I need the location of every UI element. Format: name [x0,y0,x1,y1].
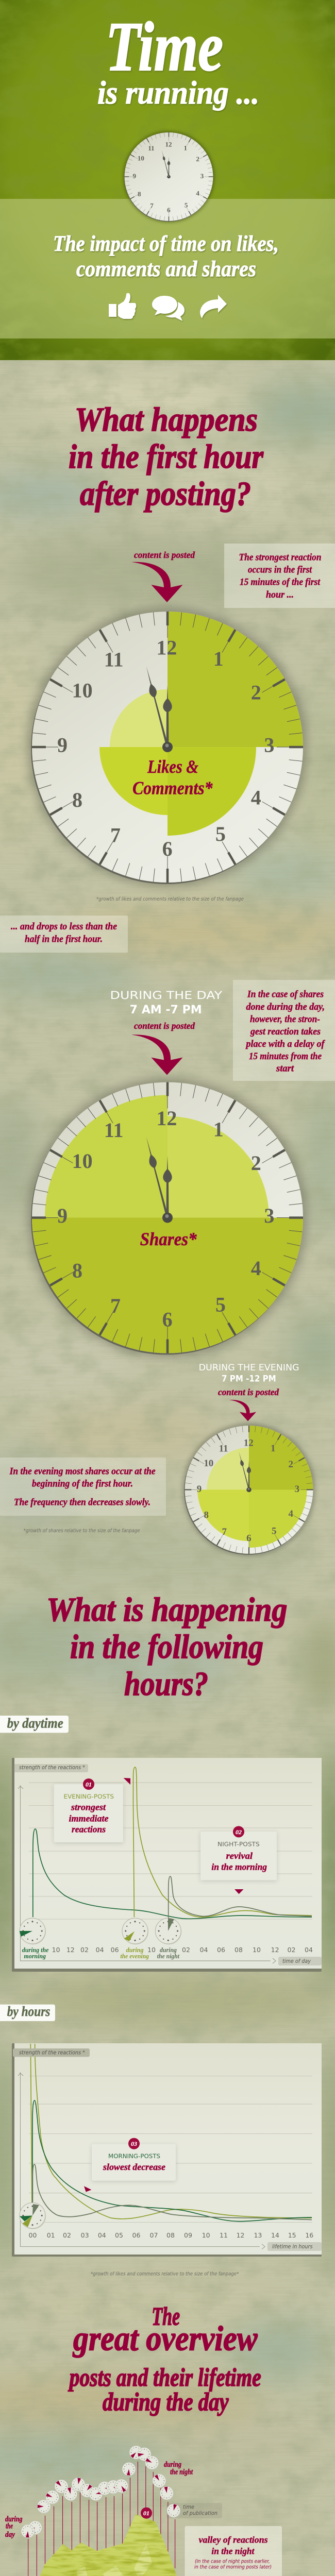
clock label: likes and comments: Comments* [132,778,213,799]
heading: the great overview: during the day [103,2387,229,2416]
callout: valley of reactions in the night [185,2526,282,2576]
x axis lifetime hours: 11 [220,2231,228,2239]
header clock: 7 [150,201,154,209]
x axis labels: publication times: the night [157,1952,179,1960]
clock chart: shares during the day: 1 [213,1118,224,1141]
line chart: reactions by hours [12,2043,322,2257]
y axis label: strength of the reactions * [19,2049,85,2056]
x axis label: lifetime in hours [272,2243,313,2250]
quadrant: 12 to 3 [249,1426,313,1490]
chart panel [12,2043,322,2257]
callout: shares during the day: gest reaction takes [250,1027,321,1037]
clock chart: likes and comments: 10 [72,679,93,702]
quadrant: 6 to 9 [197,1490,249,1541]
quadrant: 12 to 3 [167,612,303,747]
curve: morning posts [33,1829,312,1919]
callout: valley of reactions in the night: (In the case of night posts earlier, [195,2558,270,2564]
callout 01: evening posts: immediate [69,1814,109,1824]
header clock: 11 [148,144,155,152]
callout: evening shares: beginning of the first hour. [32,1479,133,1489]
arrow: to twelve o'clock [229,1400,256,1421]
subtitle: The impact of time on likes, [53,232,279,256]
clock chart: shares during the day: 8 [72,1259,82,1282]
clock chart: shares during the day: 4 [251,1257,261,1280]
x axis lifetime hours: 09 [184,2231,192,2239]
clock chart: shares during the evening: 5 [272,1526,276,1537]
clock chart: shares during the day: 10 [72,1149,93,1173]
marker: slow decrease [84,2186,91,2192]
quadrant: 6 to 9 [99,747,167,815]
callout 02: night posts: in the morning [211,1862,267,1872]
clock label: likes and comments [132,756,213,799]
x axis label [278,1957,322,1965]
x axis hours: 02 [80,1946,89,1954]
clock chart: shares during the evening [182,1423,315,1556]
clock chart: likes and comments: 8 [72,788,82,811]
header clock: 2 [196,155,199,163]
clock hands [237,1451,252,1492]
callout 01: evening posts: 01 [86,1781,92,1788]
clock icon: morning [20,1918,46,1944]
heading: what is happening in the following hours: hours? [124,1665,208,1703]
marker: morning revival [234,1889,244,1894]
x axis hours: 12 [66,1946,75,1954]
x axis lifetime hours: 01 [47,2231,55,2239]
callout 03: morning posts: MORNING-POSTS [108,2153,160,2160]
axes [18,2072,265,2249]
x axis hours: 10 [253,1946,261,1954]
clock icon: all publication times [20,2202,46,2229]
x axis lifetime hours: 16 [305,2231,313,2239]
badge 01 [141,2507,152,2519]
line chart: reactions by daytime [12,1758,322,1972]
callout: strongest reaction: The strongest reaction [239,552,322,563]
x axis hours: 12 [271,1946,279,1954]
callout 02: night posts: NIGHT-POSTS [217,1840,260,1848]
x axis hours: 10 [147,1946,156,1954]
footnote: growth of likes: *growth of likes and comments relative to the size of the fanpage* [91,2271,239,2277]
clock chart: likes and comments: 1 [213,647,224,670]
x axis lifetime hours: 12 [236,2231,244,2239]
header clock: 10 [138,154,144,162]
quadrant: 3 to 6 [167,1218,303,1353]
label: during the day: 7 AM -7 PM [130,1004,202,1016]
header clock: 4 [196,189,199,197]
x axis hours: 04 [200,1946,208,1954]
x axis lifetime hours: 15 [288,2231,296,2239]
clock chart: shares during the day: 12 [156,1107,177,1130]
legend: time of publication: time [183,2504,194,2511]
title [97,8,259,111]
footnote: growth of likes: *growth of likes and comments relative to the size of the fanpage [96,896,244,902]
clock chart: shares during the day: 6 [162,1308,173,1331]
callout: strongest reaction [224,544,335,608]
clock chart: likes and comments: 5 [215,822,226,845]
quadrant: 9 to 12 [45,1095,167,1218]
callout: strongest reaction: 15 minutes of the first [240,578,321,588]
callout: evening shares [0,1458,166,1516]
callout 01: evening posts: reactions [72,1824,106,1835]
chart panel [12,1758,322,1972]
callout 01: evening posts [54,1778,123,1842]
x axis labels: publication times: during [126,1946,144,1954]
heading: what is happening in the following hours: What is happening [46,1591,287,1629]
clock chart: shares during the evening: 4 [288,1509,293,1519]
x axis hours: 06 [111,1946,119,1954]
callout: drops to less than half: ... and drops to less than the [11,922,117,932]
quadrant: 9 to 12 [207,1448,249,1490]
clock chart: shares during the evening: 10 [204,1458,213,1469]
heading: what happens in the first hour: after posting? [80,475,251,513]
clock icons: time of publication [21,2446,174,2538]
heading: what happens in the first hour: in the first hour [69,438,264,476]
x axis lifetime hours: 06 [132,2231,140,2239]
clock hands [143,1136,173,1223]
clock chart: shares during the day: 5 [215,1293,226,1316]
clock label: shares: Shares* [140,1229,197,1249]
clock chart: shares during the evening: 7 [222,1527,227,1537]
x axis lifetime hours: 14 [271,2231,279,2239]
callout 03: morning posts: slowest decrease [103,2162,165,2172]
label: during the night: during [164,2461,181,2469]
callout: strongest reaction: hour ... [266,590,294,600]
callout: shares during the day: place with a delay of [245,1039,325,1049]
callout 01: evening posts: EVENING-POSTS [64,1793,114,1800]
grid lines [29,2076,312,2222]
callout: shares during the day [233,980,335,1081]
clock chart: likes and comments: 7 [110,823,121,847]
curve: night posts [169,1876,312,1919]
x axis hours: 02 [182,1946,190,1954]
x axis hours: 10 [52,1946,60,1954]
clock chart: shares during the evening: 6 [246,1533,252,1544]
callout: drops to less than half [0,916,128,953]
footnote: growth of shares: *growth of shares relative to the size of the fanpage [24,1528,140,1534]
heading: what is happening in the following hours [46,1591,287,1703]
x axis lifetime hours: 04 [98,2231,106,2239]
callout 02: night posts: revival [226,1851,253,1861]
clock chart: shares during the evening: 3 [295,1484,299,1495]
axes [18,1785,276,1963]
label: during the night: the night [170,2468,193,2477]
x axis hours: 06 [217,1946,225,1954]
clock chart: shares during the evening: 9 [197,1484,202,1495]
legend: time of publication: of publication [183,2511,217,2517]
callout: valley of reactions in the night: valley of reactions [199,2535,268,2545]
heading: the great overview: The [152,2302,180,2331]
header clock: 12 [165,140,172,148]
callout: shares during the day: done during the day, [246,1002,325,1012]
badge 01: 01 [143,2510,149,2517]
x axis hours [52,1946,313,1954]
heading: what happens in the first hour [69,401,264,513]
curve: night posts [32,2164,312,2219]
x axis labels: publication times: morning [24,1952,46,1960]
x axis lifetime hours: 05 [115,2231,123,2239]
vertical strength lines [28,2462,175,2576]
clock chart: shares during the evening: 11 [219,1443,228,1454]
heading: the great overview [68,2302,261,2416]
x axis labels: publication times: during [160,1946,177,1954]
icon: share arrow [200,295,227,318]
x axis lifetime hours: 03 [81,2231,89,2239]
heading: the great overview: posts and their lifetime [68,2363,261,2392]
icon: speech bubbles [152,296,185,321]
callout 02: night posts: 02 [236,1828,242,1836]
clock chart: shares during the day: 9 [57,1204,68,1227]
grid lines [29,1783,312,1919]
clock chart: likes and comments: 3 [264,734,274,756]
icon: thumbs up [109,293,136,319]
x axis labels: publication times: the evening [120,1952,149,1960]
clock chart: likes and comments: 6 [162,837,173,860]
callout: evening shares: The frequency then decreases slowly. [14,1497,150,1507]
clock chart: shares during the day: 3 [264,1204,274,1227]
callout: shares during the day: however, the stron- [250,1014,320,1025]
marker: evening peak [124,1778,130,1785]
clock chart: shares during the day [28,1079,307,1357]
clock icon: evening [122,1918,148,1944]
label: during the day: the [6,2522,13,2531]
arrow: to twelve o'clock [131,562,182,602]
clock label: likes and comments: Likes & [147,756,198,777]
clock chart: shares during the evening: 8 [204,1510,209,1520]
subtitle [53,232,279,281]
callout 03: morning posts [92,2138,176,2181]
header translucent band [0,199,335,338]
x axis lifetime hours: 07 [150,2231,158,2239]
header clock: 5 [185,201,188,209]
header clock: 8 [138,190,141,198]
quadrant: 9 to 12 [110,689,167,747]
x axis hours: 08 [234,1946,243,1954]
3D overview chart [1,2446,335,2576]
header clock: 1 [184,144,187,151]
label: during the day: day [5,2531,15,2539]
panel: green header [0,0,335,360]
clock chart: shares during the day: 11 [104,1118,123,1142]
clock chart: shares during the evening: 1 [271,1443,275,1454]
callout: valley of reactions in the night: in the night [211,2546,255,2556]
icons: like, comment, share [109,293,227,321]
curve: evening posts [30,2044,312,2219]
quadrant: 6 to 9 [32,1218,167,1353]
callout 02: night posts [200,1826,277,1880]
heading: the great overview: great overview [72,2319,258,2358]
callout: shares during the day: start [276,1063,294,1074]
label: during the day [110,989,222,1016]
legend: time of publication [166,2503,222,2518]
label: during the evening: DURING THE EVENING [199,1363,299,1373]
clock chart: likes and comments: 12 [156,636,177,659]
x axis labels: publication times: during the [22,1946,49,1954]
clock chart: shares during the evening: 12 [244,1438,254,1449]
clock chart: likes and comments: 4 [251,786,261,809]
tag: by hours: by hours [7,2004,50,2019]
header clock [123,131,214,222]
x axis lifetime hours: 08 [166,2231,175,2239]
clock chart: likes and comments [28,608,307,886]
terrain surface [28,2514,335,2576]
clock chart: shares during the day: 2 [251,1151,261,1175]
quadrant: 3 to 6 [167,747,256,836]
label: during the day [5,2515,23,2539]
tag: by daytime: by daytime [7,1716,63,1731]
label: during the evening: 7 PM -12 PM [222,1374,276,1384]
x axis label [267,2242,322,2251]
callout: evening shares: In the evening most shares occur at the [9,1467,156,1477]
x axis hours: 04 [96,1946,104,1954]
x axis hours: 02 [288,1946,295,1954]
label: during the day: DURING THE DAY [110,989,222,1002]
x axis lifetime hours: 00 [28,2231,37,2239]
curve: morning posts [32,2100,312,2222]
callout: drops to less than half: half in the first hour. [25,935,103,945]
y axis label [13,1764,88,1772]
clock chart: likes and comments: 11 [104,648,123,671]
x axis lifetime hours: 10 [202,2231,210,2239]
callout: shares during the day: In the case of shares [247,990,324,1000]
header clock: 9 [133,172,137,180]
label: during the day: during [5,2515,23,2523]
clock icon: night [155,1918,181,1944]
label: content is posted: content is posted [134,550,195,560]
label: content is posted: content is posted [134,1021,195,1031]
callout 01: evening posts: strongest [71,1802,106,1812]
label: content is posted: content is posted [218,1387,279,1397]
x axis lifetime hours [28,2231,313,2239]
x axis hours: 04 [305,1946,313,1954]
quadrant: 3 to 6 [249,1490,307,1548]
label: during the evening [199,1363,299,1384]
header clock: 3 [200,172,204,180]
clock chart: likes and comments: 9 [57,734,68,756]
callout: valley of reactions in the night: in the case of morning posts later) [194,2565,272,2570]
callout: shares during the day: 15 minutes from the [249,1052,322,1062]
heading: what happens in the first hour: What happens [75,401,258,438]
header clock: 6 [167,206,171,214]
x axis lifetime hours: 13 [254,2231,262,2239]
title: is running ... [97,74,259,111]
clock chart: shares during the evening: 2 [288,1459,293,1470]
callout: strongest reaction: occurs in the first [248,565,312,575]
quadrant: 12 to 3 [167,1116,269,1218]
clock hands [143,666,173,752]
x axis label: time of day [282,1958,311,1964]
label: during the night [164,2461,193,2477]
y axis label: strength of the reactions * [19,1765,85,1771]
heading: what is happening in the following hours: in the following [70,1628,263,1666]
callout 03: morning posts: 03 [131,2140,137,2147]
clock chart: likes and comments: 2 [251,681,261,704]
title: Time [106,8,223,86]
subtitle: comments and shares [76,257,256,281]
clock chart: shares during the day: 7 [110,1294,121,1317]
curve: evening posts [133,1767,312,1917]
y axis label [13,2048,90,2057]
x axis lifetime hours: 02 [63,2231,71,2239]
x axis labels: publication times [22,1946,179,1960]
arrow: to twelve o'clock [131,1035,182,1075]
